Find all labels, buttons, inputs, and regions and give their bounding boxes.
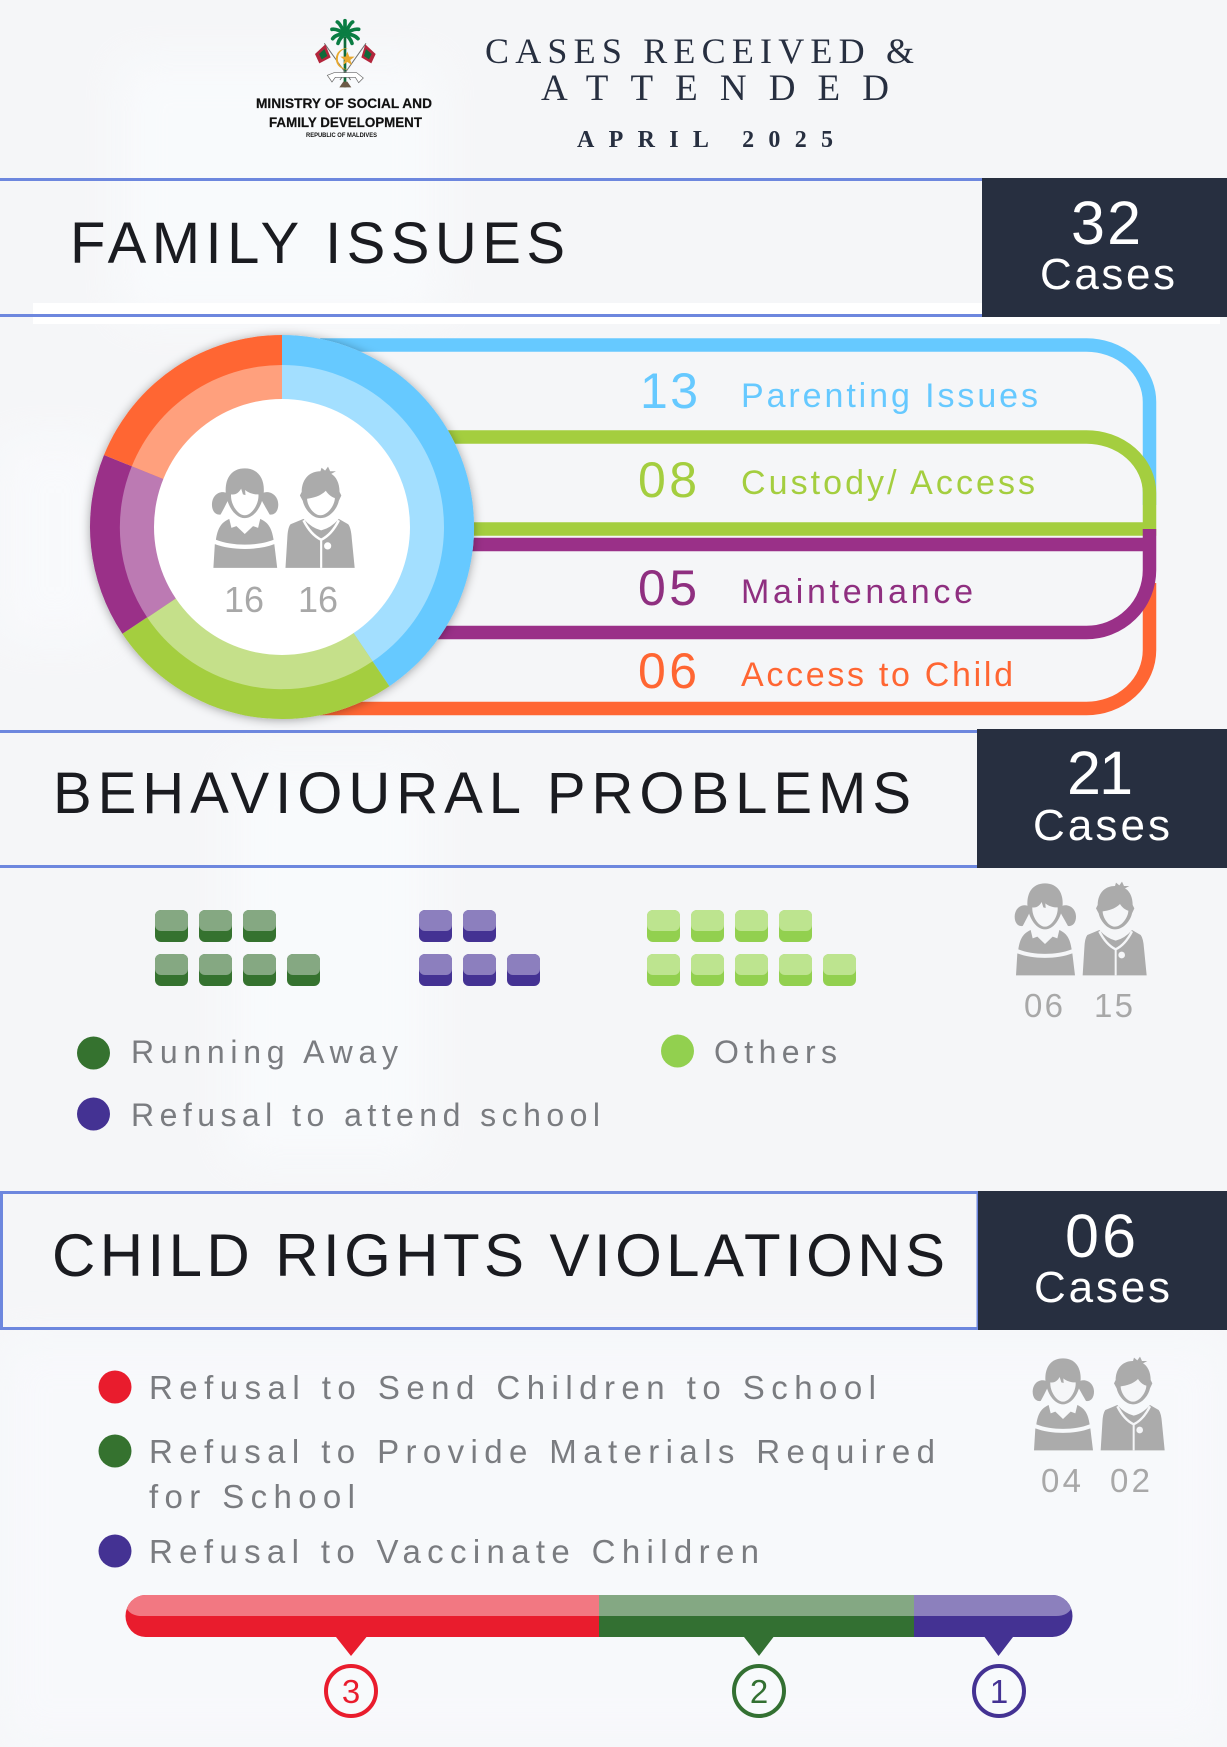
legend: maintenance: Maintenance [741,573,973,611]
case count: 06 cases: 06 [1065,1202,1136,1270]
legend: custody access: 08 [638,452,697,508]
marker: 1 case: 1 [990,1673,1008,1710]
panel: behavioural problems [0,729,1227,868]
legend: refusal to provide materials [98,1433,935,1515]
marker: 2 cases [734,1637,784,1716]
legend: refusal to send children to school: Refusal to Send Children to School [149,1369,876,1406]
icon: girl and boy, 06 and 15: 15 [1094,987,1133,1024]
icon: girl and boy, 16 and 16: 16 [298,579,338,620]
legend: refusal to attend school: Refusal to attend school [131,1097,600,1133]
legend: running away: Running Away [131,1034,398,1070]
case count: 32 cases: Cases [1040,250,1175,299]
case count: 32 cases: 32 [1071,189,1141,257]
marker: 3 cases: 3 [342,1673,360,1710]
legend: others [661,1034,837,1070]
legend: maintenance [638,560,973,616]
legend: access to child: Access to Child [741,656,1013,694]
pictogram: running away blocks [155,910,320,986]
case count: 32 cases [982,178,1227,317]
legend: custody access [638,452,1035,508]
panel: child rights violations [2,1191,1227,1330]
pictogram: refusal to attend school blocks [419,910,540,986]
icon: girl and boy, 06 and 15 [1015,882,1147,1024]
heading: child rights violations: CHILD RIGHTS VIOLATIONS [52,1222,945,1289]
ministry name: MINISTRY OF SOCIAL AND [256,96,432,111]
icon: girl and boy, 04 and 02: 04 [1041,1462,1081,1499]
legend: refusal to provide materials: Refusal to Provide Materials Required [149,1433,935,1470]
heading: family issues: FAMILY ISSUES [70,211,565,276]
icon: girl and boy, 04 and 02 [1033,1357,1165,1499]
title [485,31,914,153]
donut chart [90,335,474,719]
pictogram: others blocks [647,910,856,986]
chart connectors [320,345,1150,709]
case count: 21 cases [977,729,1227,868]
legend: parenting issues [640,363,1038,419]
header: ministry logo [256,21,432,139]
marker: 1 case [974,1637,1024,1716]
legend: others: Others [714,1034,837,1070]
heading: behavioural problems: BEHAVIOURAL PROBLEMS [53,761,911,826]
marker: 2 cases: 2 [750,1673,768,1710]
legend: parenting issues: 13 [640,363,698,419]
legend: access to child [638,643,1013,699]
icon: national emblem [315,21,376,87]
legend: maintenance: 05 [638,560,697,616]
legend: refusal to vaccinate children: Refusal to Vaccinate Children [149,1533,759,1570]
title: ATTENDED [541,68,889,109]
marker: 3 cases [326,1637,376,1716]
icon: girl and boy, 06 and 15: 06 [1024,987,1063,1024]
legend: access to child: 06 [638,643,697,699]
title: APRIL 2025 [577,127,833,153]
header: ministry logo: REPUBLIC OF MALDIVES [306,132,378,139]
panel: family issues [0,178,1227,324]
legend: parenting issues: Parenting Issues [741,377,1038,415]
icon: girl and boy, 04 and 02: 02 [1110,1462,1150,1499]
case count: 21 cases: 21 [1067,739,1133,807]
case count: 06 cases: Cases [1034,1263,1170,1312]
stacked bar chart [125,1595,1073,1716]
legend: refusal to provide materials: for School [149,1478,355,1515]
header: ministry logo: FAMILY DEVELOPMENT [269,115,423,130]
icon: girl and boy, 16 and 16 [212,467,355,620]
icon: girl and boy, 16 and 16: 16 [224,579,264,620]
case count: 06 cases [978,1191,1227,1330]
legend: custody access: Custody/ Access [741,464,1035,502]
title: CASES RECEIVED & [485,31,914,71]
case count: 21 cases: Cases [1033,801,1170,850]
